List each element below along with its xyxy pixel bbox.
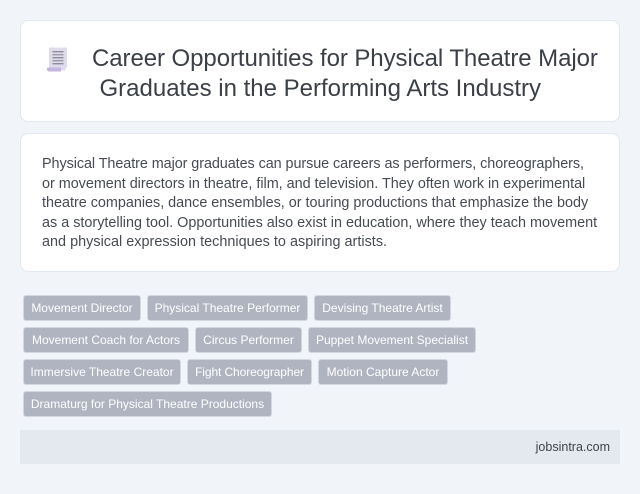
text block: description [42, 156, 598, 250]
text block: description: Physical Theatre major graduates can pursue careers as performers, choreographers, [42, 156, 584, 172]
tag [314, 295, 451, 321]
text block: description: or movement directors in theatre, film, and television. They often work in experimental [42, 176, 585, 192]
tag: Devising Theatre Artist [322, 301, 443, 315]
tag [23, 327, 189, 353]
tag [23, 359, 181, 385]
text block: description: as a storytelling tool. Opportunities also exist in education, where they teach movement [42, 215, 597, 231]
footer text: jobsintra.com [536, 440, 610, 454]
tag [308, 327, 476, 353]
tag [23, 295, 141, 321]
tag: Dramaturg for Physical Theatre Productions [31, 397, 264, 411]
heading: title: Graduates in the Performing Arts Industry [100, 74, 541, 102]
tag: Motion Capture Actor [327, 365, 439, 379]
tag group: career tags [23, 295, 476, 417]
tag [147, 295, 308, 321]
icon: document scroll [46, 48, 67, 72]
tag: Immersive Theatre Creator [30, 365, 174, 379]
tag: Movement Director [31, 301, 133, 315]
tag [195, 327, 302, 353]
panel: description [20, 133, 620, 272]
panel: footer [20, 430, 620, 464]
tag [318, 359, 448, 385]
tag [187, 359, 312, 385]
panel: header [20, 20, 620, 122]
text block: description: and physical expression techniques to aspiring artists. [42, 234, 387, 250]
tag: Circus Performer [203, 333, 294, 347]
heading: title: Career Opportunities for Physical Theatre Major [92, 45, 598, 72]
text block: description: theatre companies, dance ensembles, or touring productions that emphasize the body [42, 195, 588, 211]
tag: Puppet Movement Specialist [316, 333, 468, 347]
tag: Fight Choreographer [195, 365, 304, 379]
tag [23, 391, 272, 417]
tag: Movement Coach for Actors [32, 333, 180, 347]
tag: Physical Theatre Performer [155, 301, 300, 315]
heading: title [92, 45, 598, 102]
